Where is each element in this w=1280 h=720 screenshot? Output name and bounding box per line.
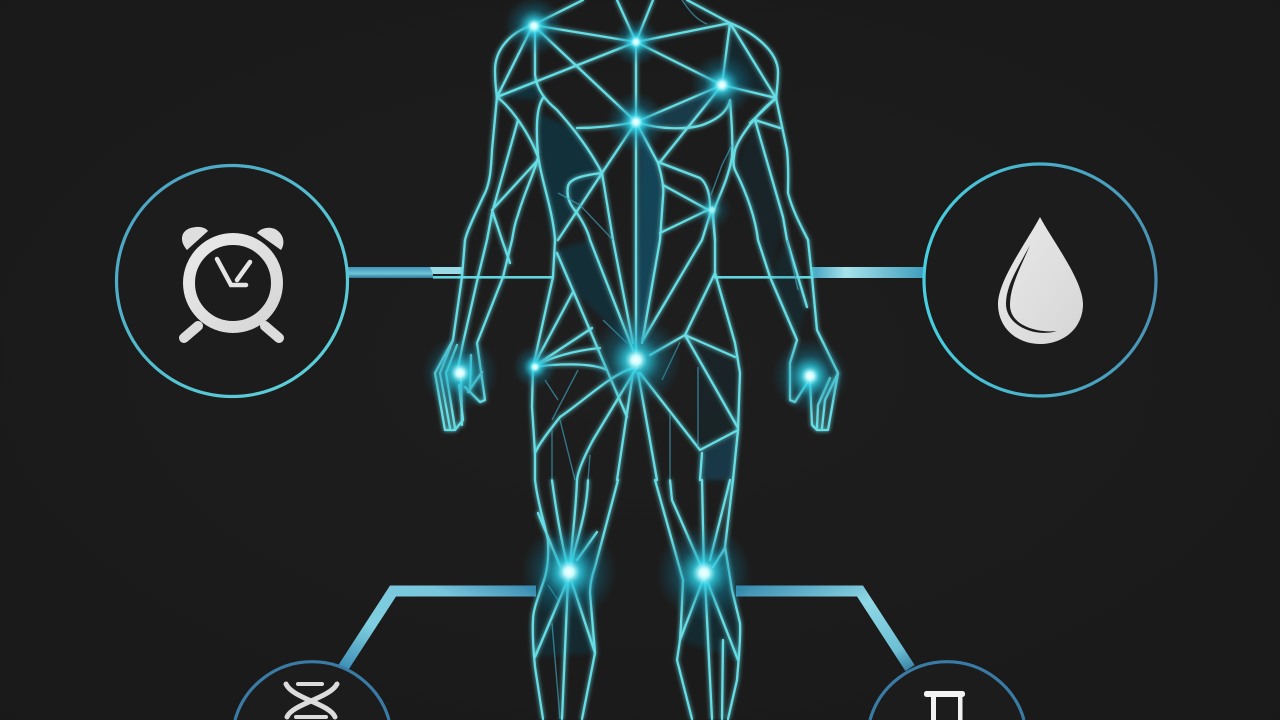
panel: hourglass circle — [870, 662, 1024, 720]
icon: hourglass — [924, 691, 965, 720]
knees and calves — [538, 480, 597, 572]
hips and thighs — [533, 292, 607, 370]
connector: DNA to body — [343, 591, 536, 668]
body wireframe lines — [435, 0, 838, 719]
body shaded facets — [497, 23, 807, 660]
body faint blue lines — [545, 0, 798, 719]
connector: clock to body — [347, 267, 554, 279]
icon: water drop — [998, 217, 1083, 344]
glow nodes at joints — [422, 0, 848, 621]
icon: DNA helix — [286, 684, 337, 717]
panel: clock circle — [116, 166, 348, 396]
left arm — [435, 97, 497, 430]
panel: water drop circle — [924, 164, 1156, 396]
neck and shoulders — [533, 0, 730, 42]
panel: DNA circle — [235, 662, 389, 720]
connector: water drop to body — [714, 267, 926, 279]
icon: alarm clock — [182, 227, 283, 338]
torso outline — [532, 98, 555, 719]
connector: hourglass to body — [736, 591, 910, 668]
right arm — [776, 98, 838, 430]
chest and abdomen — [558, 122, 663, 358]
human body figure — [422, 0, 848, 719]
